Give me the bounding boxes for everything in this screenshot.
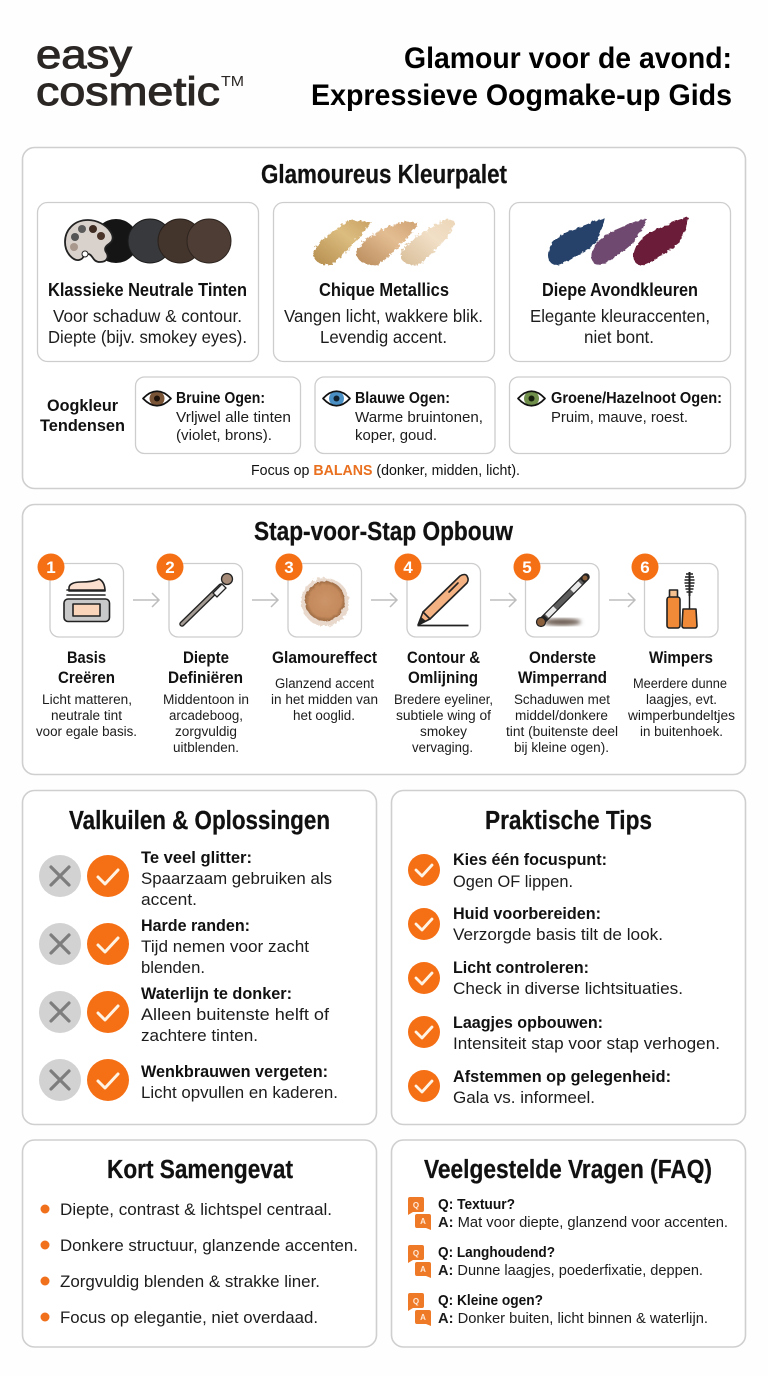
- item: Te veel glitter: accent.: [141, 890, 197, 909]
- arrows between steps: [133, 593, 635, 607]
- faq 2: A: Dunne laagjes, poederfixatie, deppen.: [438, 1262, 703, 1279]
- item: Te veel glitter: [39, 849, 332, 909]
- title: Expressieve Oogmake-up Gids: [311, 79, 732, 112]
- heading: Glamoureus Kleurpalet: Glamoureus Kleurpalet: [261, 161, 507, 189]
- icon: cream jar: [64, 579, 110, 622]
- step 4 text: Bredere eyeliner,: [394, 692, 493, 707]
- tip: laagjes: Laagjes opbouwen:: [453, 1014, 603, 1032]
- icon: smudge brush: [536, 575, 588, 626]
- card title: Klassieke Neutrale Tinten: [48, 280, 247, 300]
- step 5 text: tint (buitenste deel: [506, 724, 618, 739]
- icon: palette with neutral swatches: [65, 219, 231, 263]
- item: Wenkbrauwen vergeten: Wenkbrauwen vergeten:: [141, 1063, 328, 1081]
- faq 3: A: Donker buiten, licht binnen & waterlijn.: [438, 1310, 708, 1327]
- badge 4: 4: [403, 558, 413, 577]
- item: Harde randen: [39, 917, 309, 977]
- step 2 text: Diepte: [183, 649, 229, 667]
- card text: [530, 306, 710, 347]
- panel: Praktische Tips: [392, 790, 746, 1124]
- card text: Voor schaduw & contour.: [53, 306, 242, 326]
- eye text: (violet, brons).: [176, 427, 272, 444]
- faq 2: Q: [413, 1249, 419, 1258]
- card text: Diepte (bijv. smokey eyes).: [48, 327, 247, 347]
- tip: huid: Verzorgde basis tilt de look.: [453, 925, 663, 944]
- step 1 text: Licht matteren,: [42, 692, 132, 707]
- faq 1: [408, 1196, 728, 1231]
- item: Waterlijn te donker: zachtere tinten.: [141, 1026, 258, 1045]
- step 5 text: middel/donkere: [515, 708, 608, 723]
- step 4 text: Contour &: [407, 649, 480, 667]
- step 1 text: Creëren: [58, 669, 115, 687]
- eye text: Blauwe Ogen:: [355, 390, 450, 407]
- step 5 text: Onderste: [529, 649, 596, 667]
- step 5 text: [506, 649, 618, 755]
- bullet 1: Diepte, contrast & lichtspel centraal.: [60, 1200, 332, 1219]
- card title: Diepe Avondkleuren: [542, 280, 698, 300]
- step 1 text: neutrale tint: [51, 708, 122, 723]
- card text: Levendig accent.: [320, 327, 447, 347]
- step 1 text: Basis: [67, 649, 106, 667]
- tip: huid: Huid voorbereiden:: [453, 905, 601, 923]
- tip: gelegenheid: [408, 1068, 671, 1107]
- heading: Valkuilen & Oplossingen: Valkuilen & Oplossingen: [69, 807, 330, 835]
- heading: Stap-voor-Stap Opbouw: Stap-voor-Stap Opbouw: [254, 518, 513, 546]
- item: Wenkbrauwen vergeten: [39, 1059, 338, 1102]
- badge 6: 6: [640, 558, 650, 577]
- step 2: [156, 554, 249, 755]
- eye text: Pruim, mauve, roest.: [551, 409, 688, 426]
- step 5 text: bij kleine ogen).: [514, 740, 609, 755]
- badge 1: 1: [46, 558, 56, 577]
- icon: green eye: [518, 391, 545, 406]
- label: Oogkleur Tendensen: Oogkleur: [47, 396, 118, 415]
- tip: huid: [408, 905, 663, 944]
- title: Glamour voor de avond:: [404, 42, 732, 75]
- step 5: [506, 554, 618, 755]
- tip: laagjes: Intensiteit stap voor stap verhogen.: [453, 1034, 720, 1053]
- icon: glitter powder: [301, 578, 349, 626]
- step 4 text: smokey: [420, 724, 467, 739]
- step 2 text: uitblenden.: [173, 740, 239, 755]
- step 2 text: Middentoon in: [163, 692, 249, 707]
- step 4 text: Omlijning: [408, 669, 478, 687]
- step 4: [394, 554, 493, 755]
- badge 3: 3: [284, 558, 294, 577]
- card text: Vangen licht, wakkere blik.: [284, 306, 483, 326]
- panel: Kort Samengevat: [22, 1140, 376, 1347]
- logo: easy cosmetic: cosmetic: [36, 70, 220, 114]
- faq 1: Q: Textuur?: [438, 1196, 515, 1213]
- step 1 text: [36, 649, 137, 739]
- badge 4: [394, 554, 422, 580]
- step 4 text: [394, 649, 493, 755]
- icon: metallic swatches: [313, 219, 455, 265]
- step 3: [271, 554, 378, 723]
- badge 2: 2: [165, 558, 175, 577]
- faq 2: A: [420, 1265, 426, 1274]
- card: Chique Metallics: [274, 202, 494, 362]
- step 3 text: Glanzend accent: [275, 676, 374, 691]
- logo: easy cosmetic: TM: [221, 73, 244, 90]
- step 6 text: [627, 649, 735, 739]
- eye text: Groene/Hazelnoot Ogen:: [551, 390, 722, 407]
- item: Harde randen: Harde randen:: [141, 917, 250, 935]
- eye text: koper, goud.: [355, 427, 437, 444]
- badge 5: [514, 554, 540, 580]
- faq 1: A: [420, 1217, 426, 1226]
- tip: gelegenheid: Gala vs. informeel.: [453, 1088, 595, 1107]
- badge 3: [276, 554, 302, 580]
- badge 5: 5: [522, 558, 532, 577]
- step 6: [627, 554, 735, 739]
- item: Harde randen: Tijd nemen voor zacht: [141, 937, 309, 956]
- heading: Kort Samengevat: Kort Samengevat: [107, 1156, 293, 1184]
- icon: brown eye: [143, 391, 171, 406]
- icon: brush: [182, 574, 232, 624]
- faq 2: [408, 1244, 703, 1279]
- step 6 text: in buitenhoek.: [640, 724, 723, 739]
- note: balans: Focus op BALANS (donker, midden, licht).: [251, 463, 520, 479]
- card: Blauwe Ogen: [315, 377, 495, 454]
- heading: Praktische Tips: Praktische Tips: [485, 807, 652, 835]
- tip: focuspunt: Ogen OF lippen.: [453, 872, 573, 891]
- icon: deep swatches: [548, 217, 688, 265]
- eye text: Vrljwel alle tinten: [176, 409, 291, 426]
- item: Waterlijn te donker: Alleen buitenste helft of: [141, 1005, 329, 1024]
- step 6 text: Meerdere dunne: [633, 676, 727, 691]
- step 2 text: Definiëren: [168, 669, 243, 687]
- badge 2: [156, 554, 184, 580]
- faq 3: [408, 1292, 708, 1327]
- card: Diepe Avondkleuren: [510, 202, 730, 362]
- card text: [48, 306, 247, 347]
- step 2 text: [163, 649, 249, 755]
- step 3 text: Glamoureffect: [272, 649, 377, 667]
- tip: focuspunt: Kies één focuspunt:: [453, 851, 607, 869]
- panel: Veelgestelde Vragen (FAQ): [392, 1140, 746, 1347]
- step 6 text: wimperbundeltjes: [627, 708, 735, 723]
- step 2 text: zorgvuldig: [175, 724, 237, 739]
- step 1: [36, 554, 137, 739]
- step 5 text: Wimperrand: [518, 669, 607, 687]
- tip: focuspunt: [408, 851, 607, 891]
- icon: eyeliner pencil: [418, 574, 468, 626]
- logo: easy cosmetic: [36, 33, 244, 114]
- eye text: [355, 390, 483, 444]
- heading: FAQ: Veelgestelde Vragen (FAQ): [424, 1156, 712, 1184]
- panel: Valkuilen & Oplossingen: [22, 790, 376, 1124]
- title: [311, 42, 732, 112]
- eye text: [176, 390, 291, 444]
- card: Bruine Ogen: [136, 377, 300, 454]
- step 6 text: laagjes, evt.: [646, 692, 717, 707]
- badge 6: [632, 554, 658, 580]
- card title: Chique Metallics: [319, 280, 449, 300]
- card text: [284, 306, 483, 347]
- step 4 text: vervaging.: [412, 740, 473, 755]
- tip: licht: Check in diverse lichtsituaties.: [453, 979, 683, 998]
- tip: licht: [408, 959, 683, 998]
- step 4 text: subtiele wing of: [396, 708, 491, 723]
- eye text: [551, 390, 722, 426]
- panel: Stap-voor-Stap Opbouw: [22, 504, 746, 774]
- label: Oogkleur Tendensen: Tendensen: [40, 416, 125, 435]
- step 3 text: [271, 649, 378, 723]
- item: Wenkbrauwen vergeten: Licht opvullen en kaderen.: [141, 1083, 338, 1102]
- card text: niet bont.: [584, 327, 654, 347]
- label: Oogkleur Tendensen: [40, 396, 125, 435]
- item: Te veel glitter: Te veel glitter:: [141, 849, 252, 867]
- badge 1: [38, 554, 64, 580]
- step 1 text: voor egale basis.: [36, 724, 137, 739]
- tip: gelegenheid: Afstemmen op gelegenheid:: [453, 1068, 671, 1086]
- tip: laagjes: [408, 1014, 720, 1053]
- bullet 3: Zorgvuldig blenden & strakke liner.: [60, 1272, 320, 1291]
- icon: mascara: [667, 572, 697, 628]
- panel: Glamoureus Kleurpalet: [22, 148, 746, 488]
- tip: licht: Licht controleren:: [453, 959, 589, 977]
- item: Te veel glitter: Spaarzaam gebruiken als: [141, 869, 332, 888]
- icon: blue eye: [323, 391, 350, 406]
- bullet 4: Focus op elegantie, niet overdaad.: [60, 1308, 318, 1327]
- faq 1: A: Mat voor diepte, glanzend voor accenten.: [438, 1214, 728, 1231]
- faq 3: Q: [413, 1297, 419, 1306]
- step 6 text: Wimpers: [649, 649, 713, 667]
- step 3 text: in het midden van: [271, 692, 378, 707]
- faq 1: Q: [413, 1201, 419, 1210]
- bullet 2: Donkere structuur, glanzende accenten.: [60, 1236, 358, 1255]
- step 3 text: het ooglid.: [293, 708, 355, 723]
- item: Waterlijn te donker: Waterlijn te donker:: [141, 985, 292, 1003]
- item: Waterlijn te donker: [39, 985, 329, 1045]
- card: Klassieke Neutrale Tinten: [38, 202, 258, 362]
- faq 3: Q: Kleine ogen?: [438, 1292, 543, 1309]
- card: Groene/Hazelnoot Ogen: [510, 377, 730, 454]
- item: Harde randen: blenden.: [141, 958, 205, 977]
- card text: Elegante kleuraccenten,: [530, 306, 710, 326]
- faq 3: A: [420, 1313, 426, 1322]
- faq 2: Q: Langhoudend?: [438, 1244, 555, 1261]
- step 2 text: arcadeboog,: [169, 708, 243, 723]
- eye text: Warme bruintonen,: [355, 409, 483, 426]
- logo: easy cosmetic: easy: [36, 33, 132, 77]
- step 5 text: Schaduwen met: [514, 692, 610, 707]
- eye text: Bruine Ogen:: [176, 390, 265, 407]
